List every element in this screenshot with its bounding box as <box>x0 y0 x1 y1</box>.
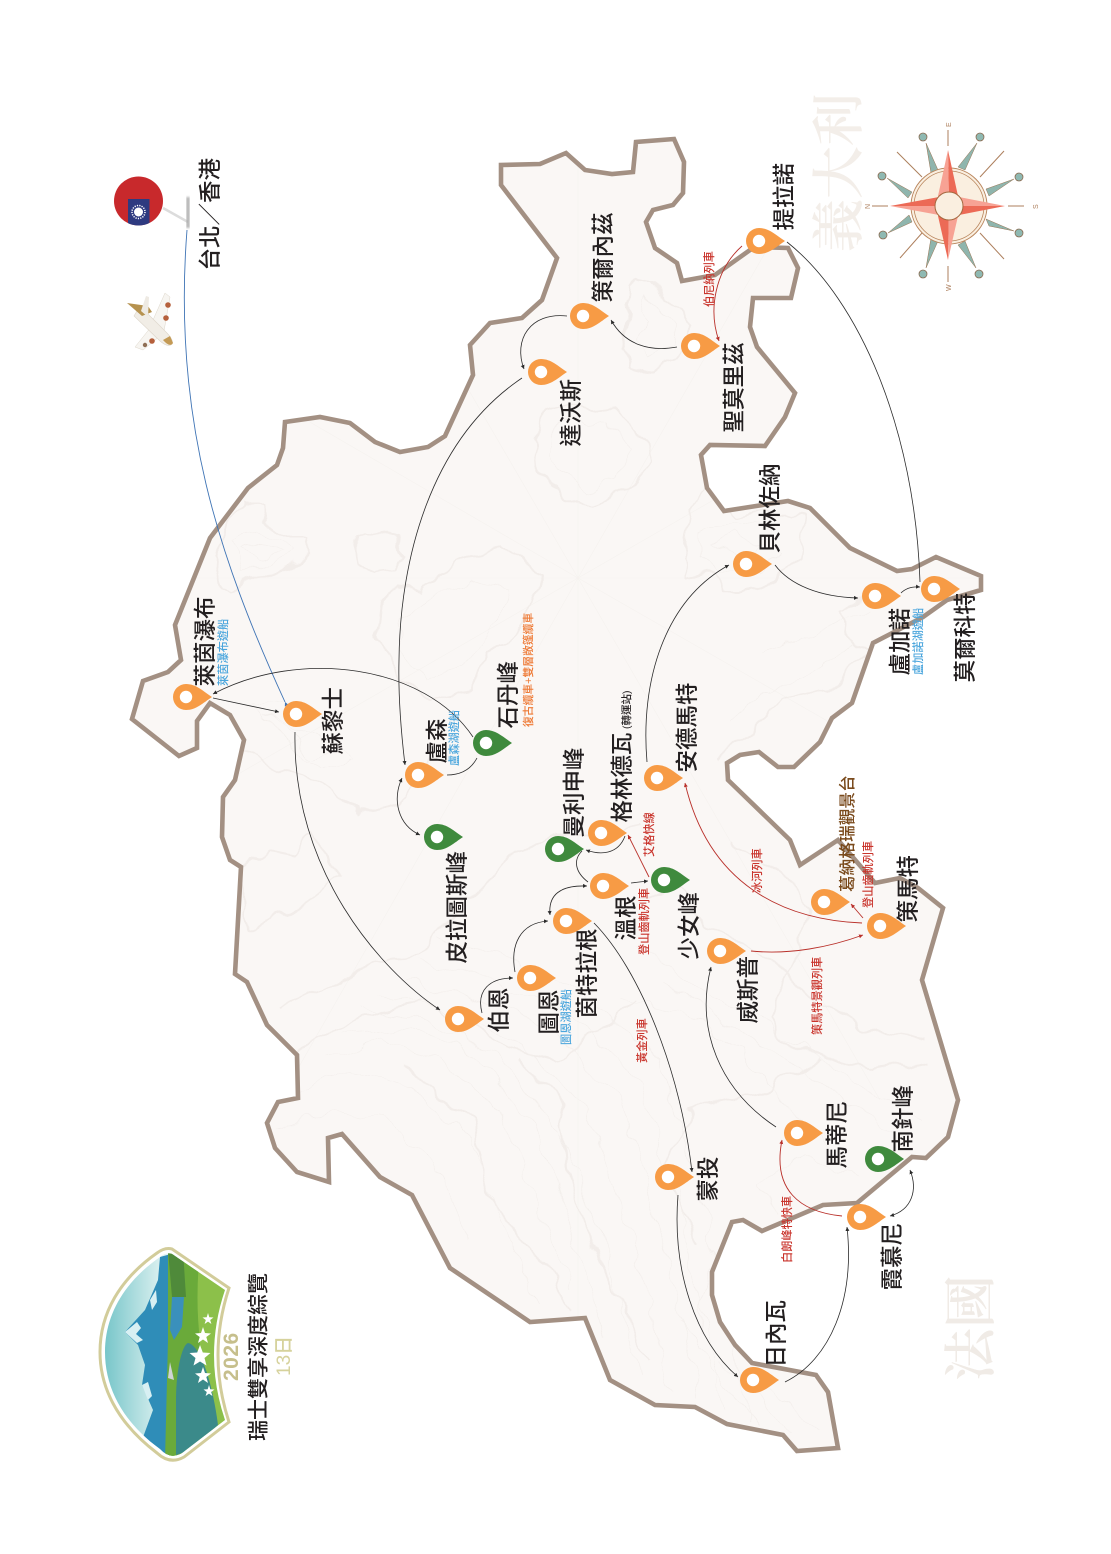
label: Lugano lake cruise: 盧加諾湖遊船 <box>911 608 925 675</box>
label: rack railway Wengen: 登山齒軌列車 <box>637 888 651 955</box>
pin: Pilatus <box>424 824 463 850</box>
route: Geneva to Chamonix <box>785 1227 848 1382</box>
pin: Interlaken <box>553 908 592 934</box>
label: transfer station: (轉運站) <box>620 690 633 729</box>
route: Interlaken to Wengen <box>550 886 587 915</box>
route: Interlaken to Montreux <box>594 923 692 1172</box>
label: Thun lake cruise: 圖恩湖遊船 <box>559 989 573 1045</box>
label: Chamonix: 霞慕尼 <box>880 1223 905 1290</box>
label: Gornergrat: 葛納格瑞觀景台 <box>837 775 857 892</box>
route: Lucerne to Pilatus <box>397 778 420 835</box>
label: Rhine Falls: 萊茵瀑布 <box>193 596 218 686</box>
label: Geneva: 日內瓦 <box>764 1300 789 1368</box>
route: Zurich to Bern <box>295 732 440 1010</box>
label: Zernez: 策爾內茲 <box>591 212 616 302</box>
route: Zermatt to Andermatt <box>685 783 862 923</box>
pin: Bern <box>445 1006 484 1032</box>
label: Thun: 圖恩 <box>537 989 562 1034</box>
label: Aiguille du Midi: 南針峰 <box>891 1085 916 1152</box>
route: Montreux to Geneva <box>677 1195 738 1377</box>
route: Jungfrau to Grindelwald <box>628 835 649 877</box>
route: Lucerne to Titlis <box>447 758 477 775</box>
map border <box>132 139 981 1451</box>
label: year 2026: 2026 <box>220 1332 243 1381</box>
label: Pilatus: 皮拉圖斯峰 <box>445 851 470 964</box>
pin: Geneva <box>740 1367 779 1393</box>
label: Bern: 伯恩 <box>487 987 512 1032</box>
pin: Titlis <box>473 730 512 756</box>
label: Visp: 威斯普 <box>736 956 761 1024</box>
pin: Mannlichen <box>545 836 584 862</box>
routes <box>184 230 920 1382</box>
pin: Chamonix <box>847 1204 886 1230</box>
pin: Rhine Falls <box>173 684 212 710</box>
route: Wengen to Jungfrau <box>631 881 648 883</box>
route: Titlis to Rhine Falls <box>213 668 473 737</box>
label: France watermark: 法國 <box>943 1275 1001 1381</box>
pin: Andermatt <box>644 765 683 791</box>
flight route <box>184 230 285 702</box>
route: Zernez to Davos <box>521 316 567 369</box>
route: Chamonix to Martigny <box>780 1140 842 1216</box>
label: Rhine Falls cruise: 萊茵瀑布遊船 <box>216 619 230 686</box>
map land area <box>132 139 981 1451</box>
pin: Montreux <box>655 1164 694 1190</box>
label: Eiger Express: 艾格快線 <box>642 812 656 857</box>
route: Wengen to Mannlichen <box>576 851 588 882</box>
pin: Thun <box>517 965 556 991</box>
pin: Zermatt <box>867 913 906 939</box>
label: Martigny: 馬蒂尼 <box>825 1101 850 1168</box>
pin: Martigny <box>784 1120 823 1146</box>
pin: Wengen <box>590 873 629 899</box>
pin: Tirano <box>746 228 785 254</box>
title: 瑞士雙享深度綜覽 <box>248 1273 270 1441</box>
route: Chamonix to Aiguille du Midi <box>890 1170 913 1216</box>
label: Lucerne lake cruise: 盧森湖遊船 <box>447 710 461 766</box>
label: Morcote: 莫爾科特 <box>953 592 978 682</box>
route: Thun to Interlaken <box>514 921 548 972</box>
pin: Lugano <box>862 583 901 609</box>
label: Zermatt: 策馬特 <box>896 855 921 922</box>
label: Tirano: 提拉諾 <box>772 163 797 230</box>
compass rose: E <box>946 122 953 127</box>
pin: Morcote <box>921 576 960 602</box>
label: Grindelwald: 格林德瓦 <box>610 732 635 822</box>
label: Montreux: 蒙投 <box>696 1156 721 1202</box>
label: rack railway Gornergrat: 登山齒軌列車 <box>861 841 875 908</box>
route: Zermatt to Gornergrat <box>851 904 863 918</box>
route: Bellinzona to Lugano <box>775 565 858 598</box>
infographic canvas <box>98 96 1038 1462</box>
label: Mannlichen: 曼利申峰 <box>562 747 587 838</box>
label: St Moritz: 聖莫里茲 <box>722 342 747 432</box>
pin: Grindelwald <box>588 820 627 846</box>
label: Lucerne: 盧森 <box>425 718 450 764</box>
label: Wengen: 溫根 <box>614 895 639 940</box>
label: Andermatt: 安德馬特 <box>675 682 700 772</box>
map of Switzerland <box>129 136 984 1454</box>
compass rose <box>865 122 1040 291</box>
route: Lugano to Morcote <box>901 587 920 593</box>
label: Golden Pass: 黃金列車 <box>635 1018 649 1063</box>
route: Morcote to Tirano <box>787 242 920 582</box>
route: St Moritz to Zernez <box>611 320 677 349</box>
logo badge <box>100 1245 229 1465</box>
label: Glacier Express: 冰河列車 <box>750 848 764 893</box>
pin: Zurich <box>283 701 322 727</box>
label: 13 days: 13日 <box>274 1336 295 1376</box>
icon: airplane <box>127 293 173 350</box>
compass rose: S <box>1033 204 1040 209</box>
label: Interlaken: 茵特拉根 <box>575 928 600 1018</box>
pin: Gornergrat <box>811 889 850 915</box>
pin: Visp <box>707 938 746 964</box>
pin: Lucerne <box>405 762 444 788</box>
label: Davos: 達沃斯 <box>559 379 584 446</box>
pin: Aiguille du Midi <box>865 1146 904 1172</box>
label: Bernina Express: 伯尼納列車 <box>702 251 716 307</box>
label: Taipei / Hong Kong: 台北／香港 <box>198 157 223 270</box>
route: Visp to Zermatt <box>751 935 863 952</box>
route: Andermatt to Bellinzona <box>646 565 729 762</box>
route: Grindelwald to Mannlichen <box>586 836 625 853</box>
route: Davos to Lucerne <box>399 378 522 765</box>
pin: St Moritz <box>681 333 720 359</box>
pin: Jungfrau <box>651 867 690 893</box>
route: Tirano to St Moritz <box>714 246 742 341</box>
label: cable cars: 復古纜車+雙層敞篷纜車 <box>521 613 535 727</box>
label: Italy watermark: 義大利 <box>811 93 869 252</box>
compass rose: N <box>865 204 872 209</box>
pin: Bellinzona <box>733 551 772 577</box>
route: Rhine Falls to Zurich <box>213 698 279 712</box>
label: Titlis: 石丹峰 <box>496 661 521 728</box>
label: Jungfrau: 少女峰 <box>677 892 702 960</box>
pin: Zernez <box>570 303 609 329</box>
label: Zermatt scenic train: 策馬特景觀列車 <box>810 957 824 1035</box>
label: Mont Blanc Express: 白朗峰特快車 <box>780 1196 794 1263</box>
route: Bern to Thun <box>481 978 513 1013</box>
pin: Davos <box>528 359 567 385</box>
label: Bellinzona: 貝林佐納 <box>758 463 783 554</box>
label: Zurich: 蘇黎士 <box>321 687 346 754</box>
route: Martigny to Visp <box>706 967 776 1127</box>
departure flag <box>114 176 190 228</box>
label: Lugano: 盧加諾 <box>888 608 913 676</box>
compass rose: W <box>946 284 953 291</box>
